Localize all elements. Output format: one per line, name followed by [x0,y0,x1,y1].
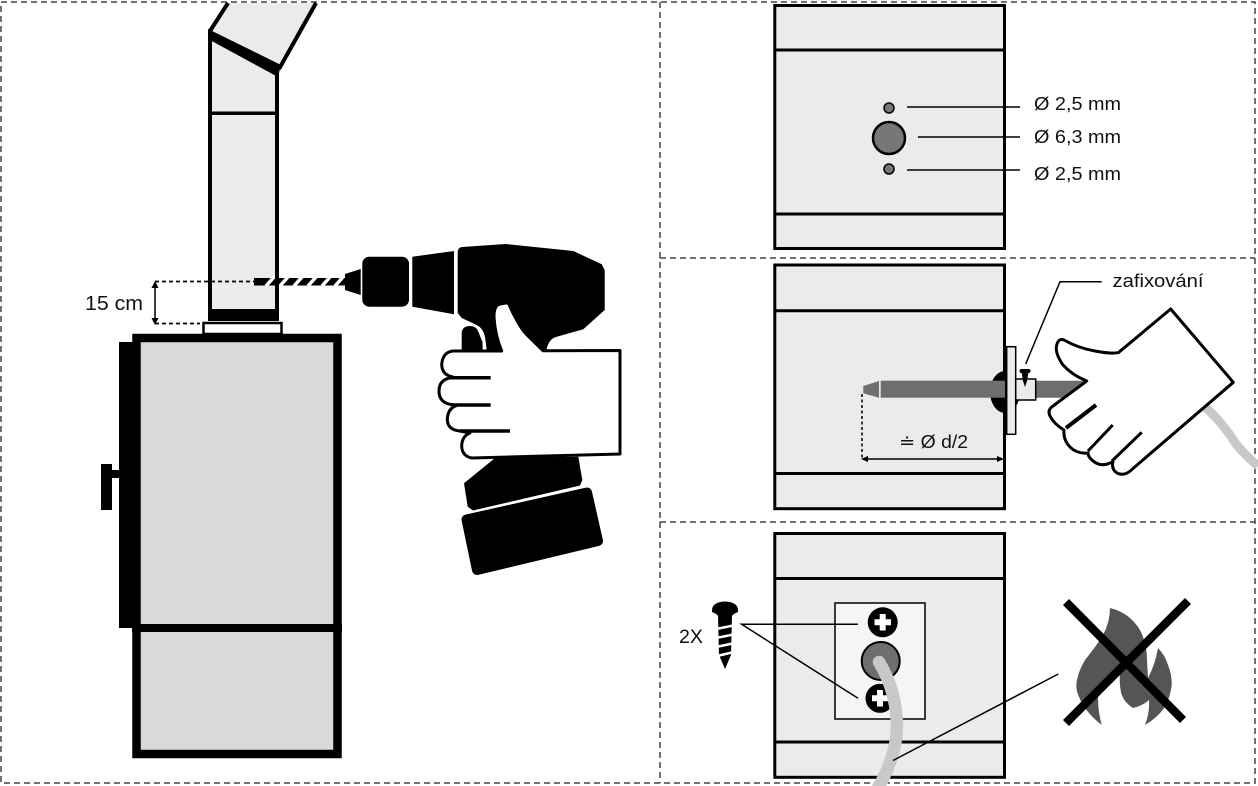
chimney pipe [208,3,316,321]
drill bit [254,277,346,286]
lower screw [866,684,894,713]
dimension: d/2 [861,394,1004,462]
mounting plate [1007,347,1016,434]
icon: no open flame [1066,601,1188,725]
label: zafixování [1026,271,1204,364]
label: 2X: 2X [679,627,703,648]
flue collar [204,323,282,334]
leader lines [742,624,1058,760]
cable [1205,407,1258,466]
panel: fixing screws [679,534,1188,786]
probe collar [1016,379,1036,400]
hand holding drill [439,303,620,458]
probe [863,381,1088,398]
dimension: 15 cm [85,281,255,325]
hole labels: Ø 6,3 mm [1034,127,1121,147]
dimension: 15 cm: 15 cm [85,292,143,315]
gloved hand [1049,309,1233,474]
pipe section [775,6,1004,248]
panel: hole sizes [775,6,1121,248]
hole labels [907,94,1121,184]
screw icon [712,602,738,669]
hole labels: Ø 2,5 mm [1034,94,1121,114]
sealing blob [990,371,1020,413]
stove body [101,338,342,754]
pipe section [775,265,1004,509]
probe opening [862,642,900,680]
upper screw [868,607,898,637]
panel: stove and drilling [85,3,620,754]
drilled holes [873,103,905,174]
cable [878,662,897,786]
panel: inserting probe [775,265,1258,509]
dimension: d/2: ≐ Ø d/2 [899,432,968,452]
label: zafixování: zafixování [1112,271,1204,291]
fixing screw [1020,369,1030,387]
pipe section [775,534,1004,777]
drill [345,244,605,570]
mounting plate [835,603,925,719]
hole labels: Ø 2,5 mm [1034,164,1121,184]
